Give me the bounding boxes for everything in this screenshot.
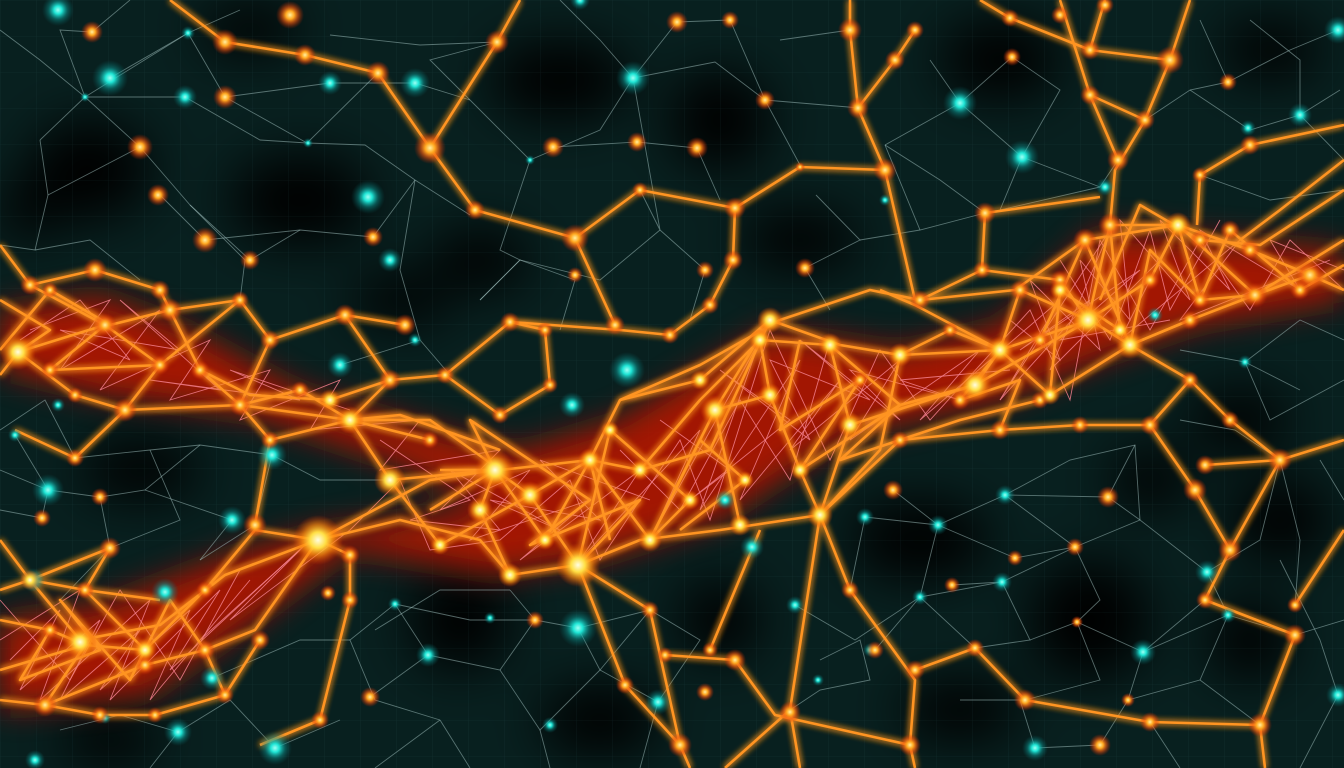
left arm upper band: [0, 245, 670, 525]
red band glow: [0, 230, 1344, 710]
right band: [920, 190, 1344, 768]
centre band: [318, 290, 1190, 575]
upper branches: [170, 0, 1344, 335]
pink mesh inside band: [0, 220, 1344, 700]
lower left band: [0, 530, 350, 745]
bright yellow hub nodes: [0, 212, 1191, 662]
lower branches: [578, 515, 1260, 768]
